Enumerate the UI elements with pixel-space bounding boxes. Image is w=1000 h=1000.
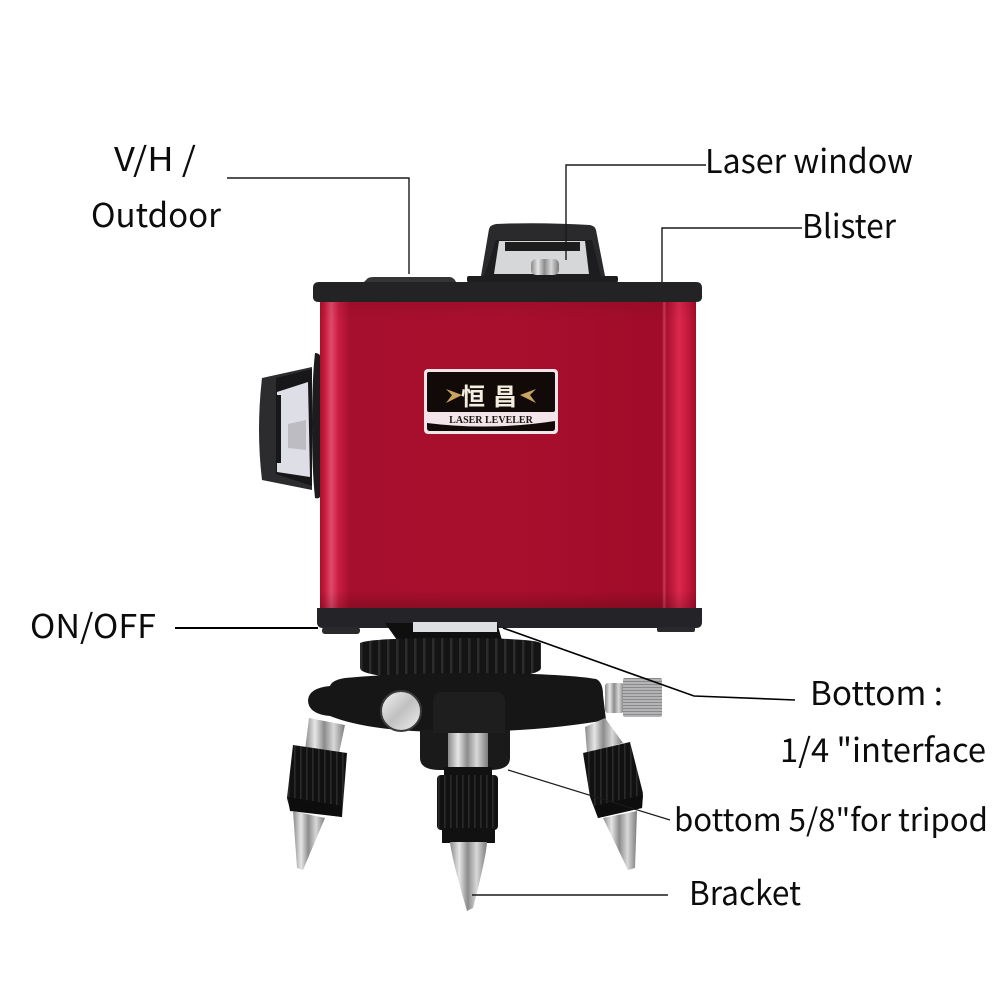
label: Blister: Blister (802, 200, 896, 248)
side laser window (259, 353, 321, 498)
bottom plate (317, 608, 702, 628)
left leg (287, 718, 347, 870)
leader: on/off (175, 627, 318, 629)
brand label: 恒昌 (461, 377, 525, 412)
center leg (437, 733, 498, 911)
label: Laser window: Laser window (705, 135, 913, 183)
label: V/H: V/H / (114, 133, 196, 181)
label: Bottom: Bottom : (810, 667, 943, 715)
label: Bracket: Bracket (689, 867, 801, 915)
label: ON/OFF: ON/OFF (30, 600, 156, 648)
rotating ribbed ring (360, 638, 541, 680)
leader: bracket (472, 894, 668, 896)
on/off switch (385, 622, 502, 640)
right leg (583, 718, 643, 870)
label: 1/4 interface: 1/4 "interface (780, 724, 986, 772)
leader: V/H outdoor (227, 178, 409, 274)
V/H outdoor button (362, 277, 457, 284)
label: Outdoor: Outdoor (91, 189, 221, 237)
leader: blister (662, 228, 802, 282)
silver side screw (605, 678, 662, 717)
icon: tripod bracket (287, 638, 662, 911)
brand label (424, 369, 558, 434)
top laser window turret (467, 223, 618, 282)
label: bottom 5/8 for tripod: bottom 5/8"for tripod (674, 795, 988, 840)
center leg collar (420, 730, 510, 770)
top cap (313, 282, 702, 302)
base disc (308, 673, 606, 732)
leader: laser window (566, 165, 706, 260)
red body (320, 298, 696, 612)
leader: bottom for tripod (508, 770, 670, 820)
leader lines (175, 165, 802, 895)
icon: laser level device (259, 223, 702, 640)
leader: bottom interface (503, 628, 795, 700)
rubber feet (322, 627, 360, 634)
brand label: LASER LEVELER (449, 415, 534, 426)
silver lock knob (381, 691, 421, 731)
